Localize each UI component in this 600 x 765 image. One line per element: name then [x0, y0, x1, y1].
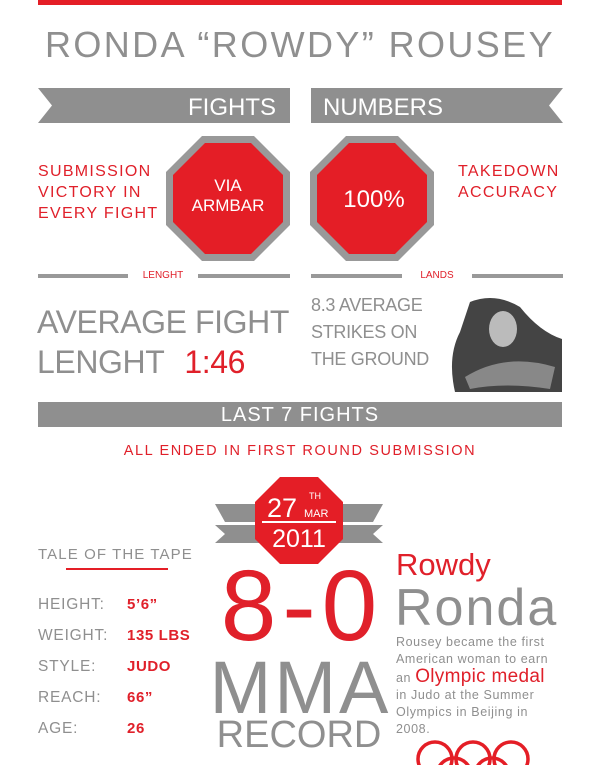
bar: last 7 fights: LAST 7 FIGHTS [221, 404, 379, 426]
banner: numbers: NUMBERS [323, 94, 443, 121]
divider: lands [311, 270, 563, 281]
text: takedown accuracy [458, 163, 560, 201]
banner: numbers [311, 88, 563, 123]
divider: lands: LANDS [420, 270, 454, 281]
octagon: via armbar [166, 136, 290, 261]
title: RONDA “ROWDY” ROUSEY [45, 24, 555, 65]
olympic paragraph [396, 635, 548, 736]
rowdy ronda: Rowdy [396, 547, 491, 582]
olympic paragraph: in Judo at the Summer [396, 688, 534, 702]
olympic paragraph: Rousey became the first [396, 635, 545, 649]
text: average fight length: LENGHT 1:46 [37, 344, 245, 380]
olympic paragraph: Olympics in Beijing in [396, 705, 528, 719]
icon: olympic rings [416, 740, 530, 765]
banner: fights [38, 88, 290, 123]
text: Ronda [395, 579, 558, 637]
tale of the tape: AGE: [38, 720, 78, 737]
bar: last 7 fights [38, 402, 562, 427]
tale of the tape: WEIGHT: [38, 627, 108, 644]
divider: lenght [38, 270, 290, 281]
tale of the tape: TALE OF THE TAPE [38, 546, 193, 563]
text: takedown accuracy: ACCURACY [458, 184, 558, 201]
text: submission victory: SUBMISSION [38, 163, 151, 180]
photo placeholder [452, 298, 562, 392]
text: average fight length: AVERAGE FIGHT [37, 304, 289, 340]
text: submission victory: EVERY FIGHT [38, 205, 158, 222]
olympic paragraph: American woman to earn [396, 652, 548, 666]
text: submission victory [38, 163, 158, 222]
date badge: 2011 [272, 525, 326, 553]
record 8-0: 8-0 [221, 550, 383, 662]
divider: lenght: LENGHT [143, 270, 183, 281]
subtitle: ALL ENDED IN FIRST ROUND SUBMISSION [124, 443, 476, 459]
text: average fight length [37, 304, 289, 380]
tale of the tape: 26 [127, 720, 145, 737]
text: strikes: 8.3 AVERAGE [311, 295, 422, 315]
text: strikes: STRIKES ON [311, 322, 417, 342]
RECORD: RECORD [217, 714, 381, 756]
date badge: TH [309, 491, 321, 501]
text: strikes [311, 295, 429, 369]
tale of the tape: JUDO [127, 658, 171, 675]
MMA: MMA [210, 646, 391, 729]
tale of the tape: REACH: [38, 689, 101, 706]
text: strikes: THE GROUND [311, 349, 429, 369]
octagon: via armbar: VIA [214, 176, 242, 195]
tale of the tape: 66” [127, 689, 153, 706]
octagon: 100%: 100% [343, 186, 405, 213]
banner: fights: FIGHTS [188, 94, 276, 121]
tale of the tape: HEIGHT: [38, 596, 105, 613]
octagon: 100% [310, 136, 434, 261]
date badge [215, 477, 383, 564]
tale of the tape: 135 LBS [127, 627, 190, 644]
top red bar [38, 0, 562, 5]
octagon: via armbar: ARMBAR [192, 196, 264, 215]
text: takedown accuracy: TAKEDOWN [458, 163, 560, 180]
date badge: MAR [304, 508, 328, 520]
olympic paragraph: an Olympic medal [396, 666, 545, 687]
tale of the tape: 5’6” [127, 596, 158, 613]
text: submission victory: VICTORY IN [38, 184, 142, 201]
date badge: 27 [267, 493, 297, 523]
tale of the tape: STYLE: [38, 658, 96, 675]
olympic paragraph: 2008. [396, 722, 430, 736]
tale of the tape [38, 546, 193, 737]
